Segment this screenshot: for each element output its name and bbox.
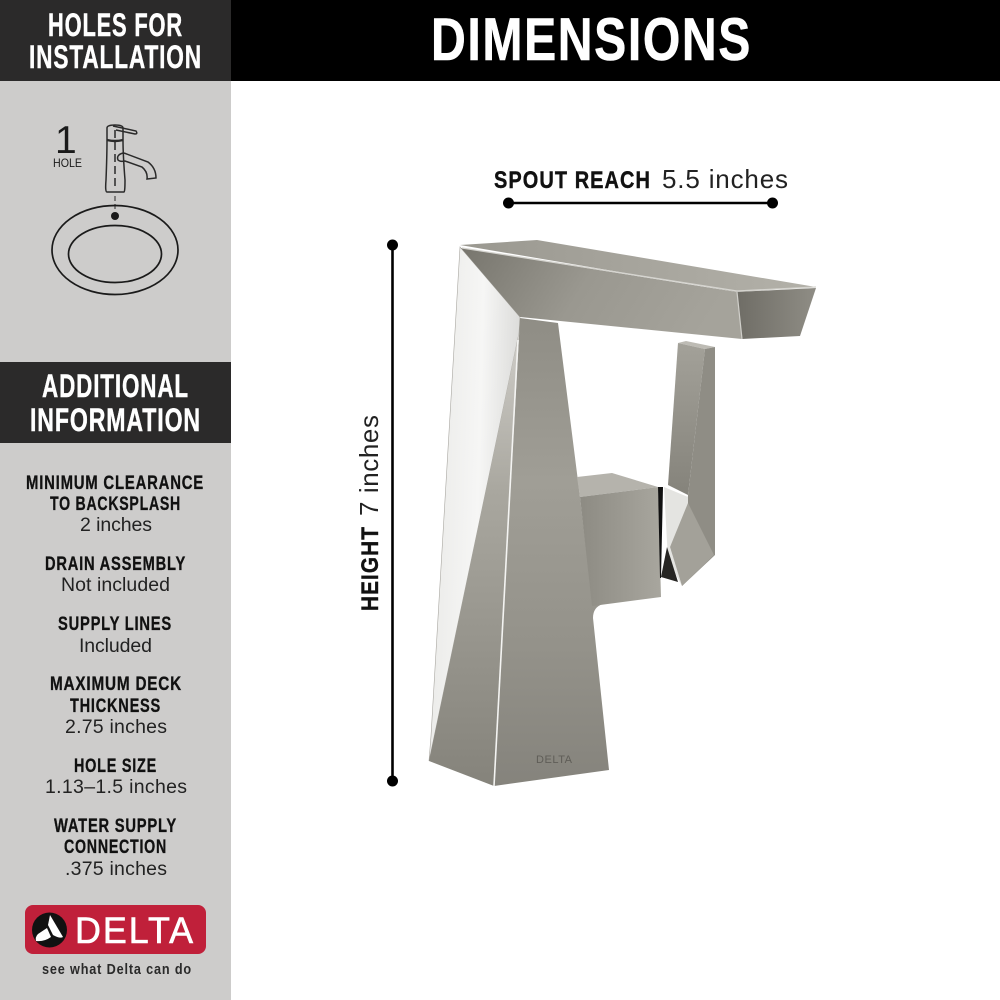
faucet: spout edge highlight	[462, 248, 816, 291]
header: additional information: INFORMATION	[30, 402, 201, 438]
dimension: height: HEIGHT	[357, 526, 384, 611]
faucet: spout end	[737, 288, 816, 339]
header: holes for installation: HOLES FOR	[48, 7, 183, 43]
dimension: spout reach: 5.5 inches	[662, 164, 788, 194]
spec: drain assembly: Not included	[61, 574, 170, 596]
spec: minimum clearance: 2 inches	[80, 514, 152, 536]
spec: maximum deck thickness: 2.75 inches	[65, 716, 167, 738]
hole count: HOLE	[53, 156, 82, 170]
header: additional information: ADDITIONAL	[42, 368, 189, 404]
faucet: engraved brand: DELTA	[536, 754, 573, 766]
spec: hole size: 1.13–1.5 inches	[45, 776, 187, 798]
spec: hole size: HOLE SIZE	[74, 756, 157, 777]
spec: drain assembly	[45, 554, 186, 596]
sink with mounting hole	[52, 206, 178, 294]
logo: Delta: see what Delta can do	[42, 961, 192, 978]
spec: water supply connection: .375 inches	[65, 858, 167, 880]
faucet: center body	[494, 318, 609, 786]
header: dimensions: DIMENSIONS	[431, 6, 752, 73]
spec: minimum clearance: TO BACKSPLASH	[50, 494, 181, 515]
faucet: shaded left facet	[429, 333, 519, 786]
header: dimensions	[231, 0, 1000, 81]
spec: water supply connection: WATER SUPPLY	[54, 816, 177, 837]
spec: water supply connection	[54, 816, 177, 880]
spec: hole size	[45, 756, 187, 798]
faucet line drawing	[106, 125, 156, 212]
dimension: height: 7 inches	[354, 415, 384, 516]
dimension: spout reach	[494, 164, 788, 208]
faucet: spout front	[461, 248, 742, 339]
faucet: bright left facet	[429, 247, 520, 761]
faucet: handle block	[577, 473, 663, 606]
faucet: highlight edge	[494, 340, 518, 786]
spec: supply lines: SUPPLY LINES	[58, 614, 172, 635]
spec: maximum deck thickness: THICKNESS	[70, 696, 161, 717]
faucet: spout top	[460, 240, 816, 292]
dimension: spout reach: SPOUT REACH	[494, 167, 651, 194]
spec: drain assembly: DRAIN ASSEMBLY	[45, 554, 186, 575]
faucet: lever	[661, 341, 715, 586]
spec: maximum deck thickness: MAXIMUM DECK	[50, 674, 182, 695]
sidebar background	[0, 0, 231, 1000]
logo: Delta: DELTA	[75, 910, 195, 951]
spec: supply lines: Included	[79, 635, 152, 657]
logo: Delta	[25, 905, 206, 978]
header: holes for installation: INSTALLATION	[29, 39, 202, 75]
arrow: height line	[387, 240, 398, 786]
hole count	[53, 119, 82, 170]
icon: Delta emblem	[32, 912, 67, 948]
spec: maximum deck thickness	[50, 674, 182, 738]
faucet product illustration	[429, 240, 816, 786]
hole count: 1	[55, 119, 77, 162]
icon: one hole faucet and sink	[52, 119, 178, 294]
spec: minimum clearance	[26, 473, 204, 536]
spec: minimum clearance: MINIMUM CLEARANCE	[26, 473, 204, 494]
header: holes for installation	[0, 0, 231, 81]
spec: water supply connection: CONNECTION	[64, 837, 167, 858]
dimension: height	[354, 240, 398, 786]
header: additional information	[0, 362, 231, 443]
spec: supply lines	[58, 614, 172, 657]
arrow: reach line	[503, 198, 778, 208]
